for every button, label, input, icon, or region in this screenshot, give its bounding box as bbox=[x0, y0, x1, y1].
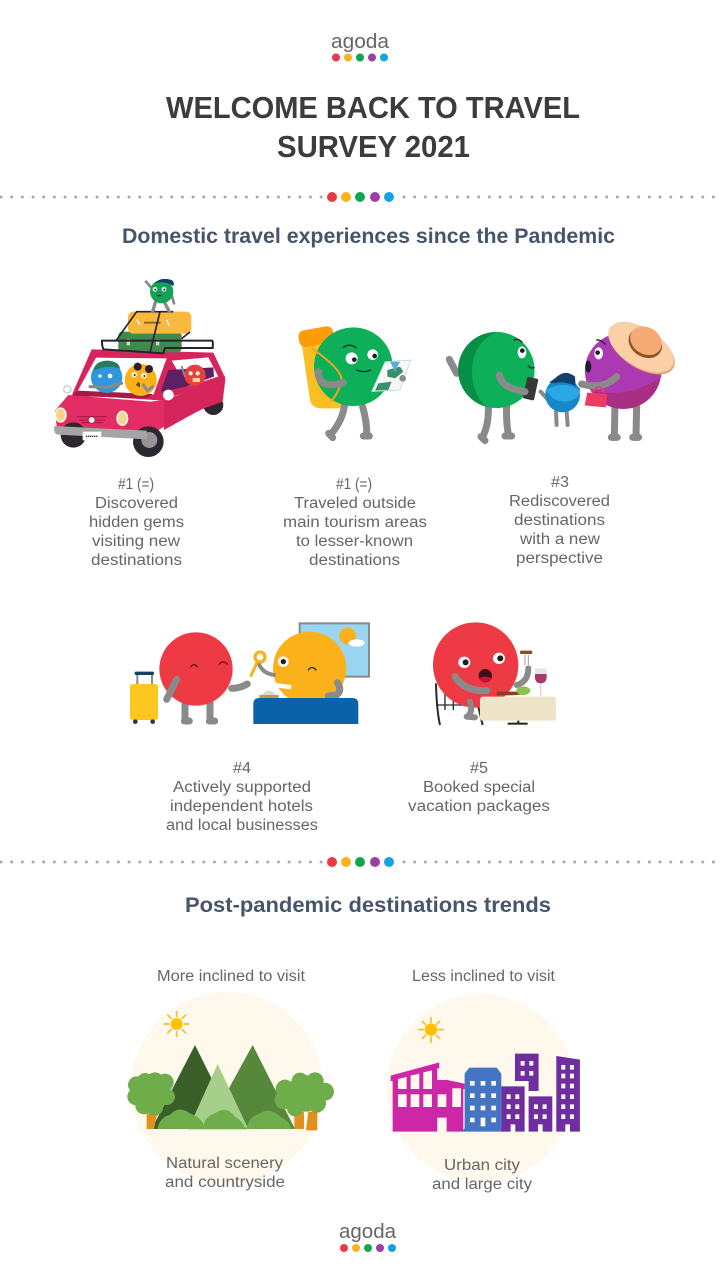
text: item 5 bbox=[408, 760, 550, 815]
text: item 3: #3 bbox=[551, 474, 569, 491]
heading: post-pandemic trends: Post-pandemic destinations trends bbox=[185, 894, 551, 917]
luggage on roof bbox=[102, 312, 213, 353]
text: item 3: Rediscovered bbox=[509, 493, 610, 510]
text: item 1b: Traveled outside bbox=[294, 495, 416, 512]
text: item 5: #5 bbox=[470, 760, 488, 777]
character: red diner bbox=[433, 622, 532, 725]
character: yellow receptionist bbox=[259, 632, 346, 705]
title: SURVEY 2021 bbox=[277, 129, 470, 164]
label: more inclined: More inclined to visit bbox=[157, 968, 306, 985]
driver: blue character bbox=[64, 361, 122, 393]
heading: domestic travel experiences: Domestic travel experiences since the Pandemic bbox=[122, 225, 615, 248]
character: green with phone bbox=[449, 332, 538, 441]
text: item 5: vacation packages bbox=[408, 798, 550, 815]
text: item 1a: hidden gems bbox=[89, 514, 184, 531]
text: item 1a bbox=[89, 476, 184, 569]
logo: agoda top: agoda bbox=[331, 31, 390, 53]
blue building bbox=[461, 1068, 503, 1132]
window bbox=[300, 623, 369, 677]
text: item 1b: #1 (=) bbox=[336, 476, 372, 493]
title: WELCOME BACK TO TRAVEL bbox=[166, 90, 580, 125]
mountains bbox=[152, 1045, 295, 1129]
key bbox=[251, 652, 265, 677]
panel: nature scene bbox=[127, 992, 334, 1184]
text: item 4 bbox=[166, 760, 318, 834]
text: item 1b: destinations bbox=[309, 552, 400, 569]
character: purple with hat bbox=[582, 312, 683, 437]
illustration: hotel check-in and dining bbox=[130, 622, 556, 725]
panel: city scene bbox=[387, 994, 580, 1182]
reception desk with bell bbox=[253, 691, 358, 724]
character: backpacker with map bbox=[297, 325, 411, 438]
text: urban city: and large city bbox=[432, 1176, 532, 1193]
text: item 1b: main tourism areas bbox=[283, 514, 427, 531]
suitcase bbox=[130, 672, 158, 724]
text: urban city bbox=[432, 1157, 532, 1193]
illustration: backpacker and family bbox=[297, 312, 683, 441]
text: item 4: Actively supported bbox=[173, 779, 311, 796]
label: less inclined: Less inclined to visit bbox=[412, 968, 556, 985]
passenger: yellow character bbox=[125, 363, 157, 396]
illustration: car with luggage bbox=[54, 279, 225, 457]
text: item 1a: visiting new bbox=[92, 533, 181, 550]
passenger: red character bbox=[182, 365, 206, 386]
magenta building bbox=[391, 1062, 465, 1132]
text: item 3 bbox=[509, 474, 610, 567]
text: item 3: with a new bbox=[519, 531, 601, 548]
title bbox=[166, 90, 580, 164]
text: item 1b bbox=[283, 476, 427, 569]
logo: agoda bottom: agoda bbox=[339, 1221, 397, 1243]
text: item 4: and local businesses bbox=[166, 817, 318, 834]
text: natural scenery bbox=[165, 1155, 285, 1191]
text: natural scenery: Natural scenery bbox=[166, 1155, 283, 1172]
text: item 3: perspective bbox=[516, 550, 603, 567]
purple buildings bbox=[501, 1054, 580, 1132]
logo: agoda bottom bbox=[339, 1221, 397, 1252]
text: item 1a: destinations bbox=[91, 552, 182, 569]
text: item 5: Booked special bbox=[423, 779, 535, 796]
text: urban city: Urban city bbox=[444, 1157, 520, 1174]
text: item 1a: #1 (=) bbox=[118, 476, 154, 493]
logo: agoda top bbox=[331, 31, 390, 62]
icon: sun bbox=[164, 1011, 189, 1037]
character: green on roof bbox=[146, 279, 174, 312]
text: item 4: independent hotels bbox=[170, 798, 313, 815]
character: small blue child bbox=[541, 373, 580, 425]
trees and bushes bbox=[127, 1072, 334, 1130]
map bbox=[372, 360, 411, 392]
text: natural scenery: and countryside bbox=[165, 1174, 285, 1191]
text: item 1b: to lesser-known bbox=[296, 533, 413, 550]
icon: sun bbox=[418, 1017, 444, 1043]
text: item 1a: Discovered bbox=[95, 495, 178, 512]
text: item 3: destinations bbox=[514, 512, 605, 529]
text: item 4: #4 bbox=[233, 760, 251, 777]
character: red guest bbox=[159, 632, 247, 721]
table with food and wine bbox=[480, 668, 556, 725]
